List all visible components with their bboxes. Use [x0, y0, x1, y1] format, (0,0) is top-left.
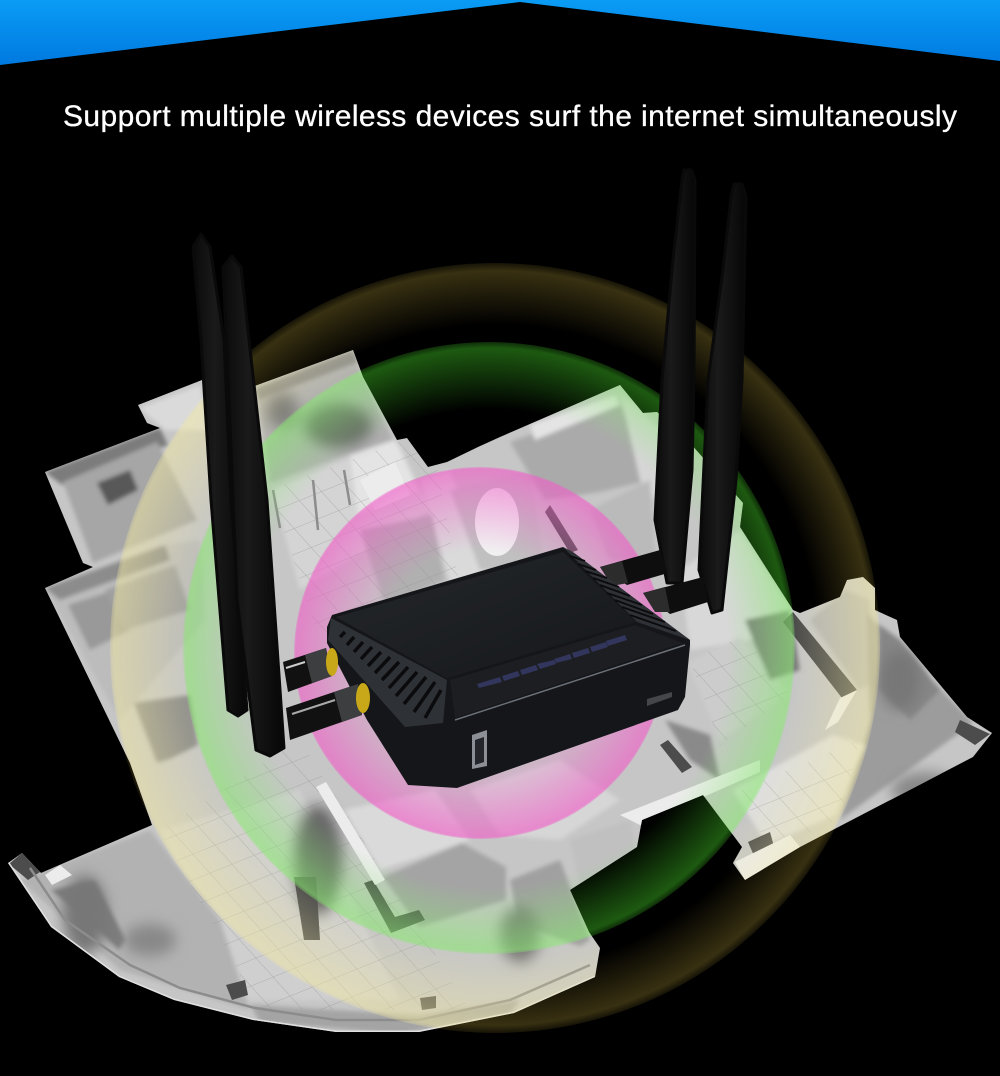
signal zone: inner pink	[294, 467, 666, 839]
signal glow on black: yellow rim	[110, 263, 880, 1033]
floor plan	[8, 350, 992, 1032]
router top face	[336, 552, 636, 678]
front panel glass	[450, 625, 683, 718]
walls and pillars	[9, 505, 990, 1010]
label strip	[647, 692, 672, 706]
status LEDs	[477, 635, 627, 688]
tub	[475, 488, 519, 556]
antenna: front left 1	[193, 234, 247, 716]
tile grid	[160, 740, 470, 1010]
antenna: rear right 2	[699, 184, 746, 613]
antenna: front left 2	[223, 256, 284, 756]
side vents right	[563, 547, 690, 640]
USB port	[472, 730, 487, 769]
signal zone: outer yellow	[110, 350, 880, 1028]
light edge line	[455, 645, 685, 720]
signal zone: middle green	[183, 342, 795, 954]
rooms	[20, 350, 973, 1034]
router body	[327, 547, 690, 788]
antenna: rear right 1	[655, 170, 695, 583]
signal glow on black: green rim	[183, 342, 795, 954]
connectors: front	[283, 648, 370, 740]
connectors: rear	[600, 550, 708, 614]
heading: Support multiple wireless devices surf the internet simultaneously	[63, 100, 957, 133]
router with antennas	[193, 170, 746, 788]
blue top banner	[0, 0, 1000, 65]
side vents left	[328, 618, 447, 727]
dark furniture and plants	[63, 392, 959, 963]
